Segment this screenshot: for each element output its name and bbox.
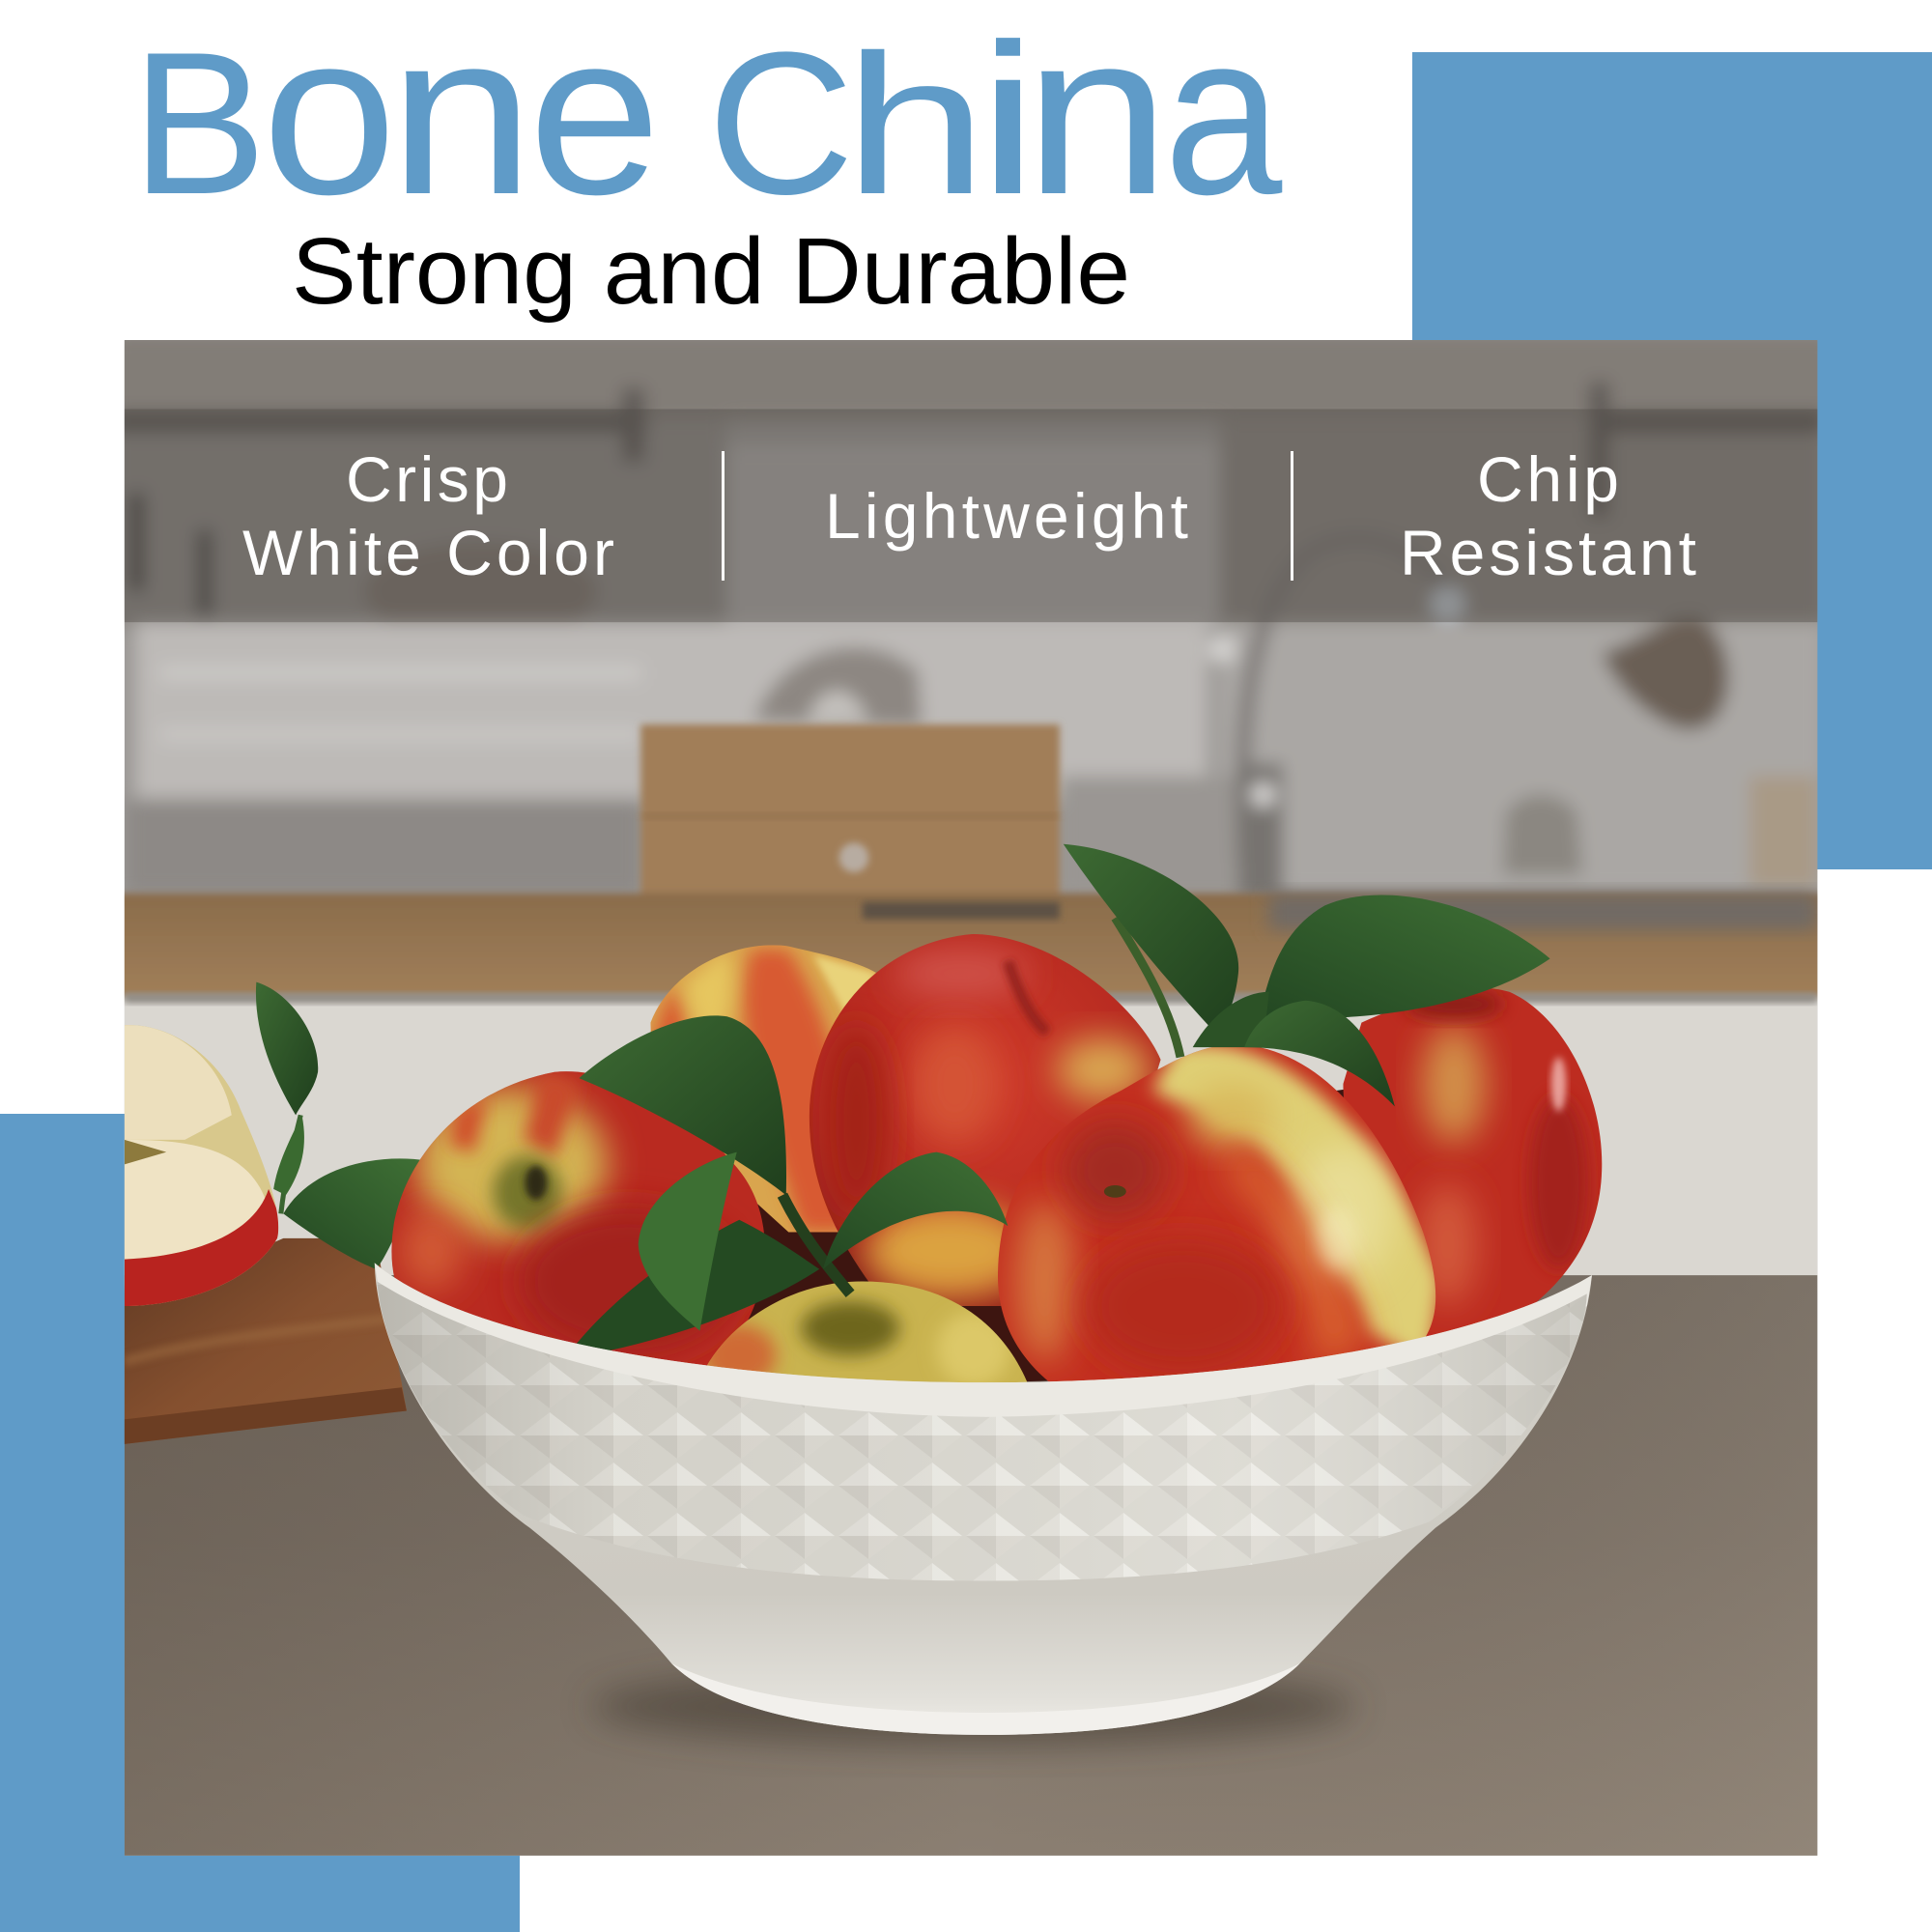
apples backing shadow (748, 1090, 1344, 1381)
label line: White Color: White Color (242, 517, 614, 588)
leaves: left sprig (256, 982, 428, 1269)
blue block: top right (1412, 52, 1932, 869)
bowl shadow (591, 1667, 1355, 1746)
cutting board (125, 1238, 407, 1444)
table top (125, 1275, 1817, 1856)
label line: Crisp: Crisp (346, 443, 508, 515)
leaves: top sprig (1064, 844, 1550, 1106)
blue block: bottom left (0, 1114, 520, 1932)
label line: Resistant: Resistant (1400, 517, 1696, 588)
divider left (722, 451, 724, 581)
label line: Chip: Chip (1477, 443, 1619, 515)
bowl (357, 1263, 1602, 1735)
grey overlay band (125, 409, 1817, 622)
feature: lightweight: Lightweight (825, 480, 1188, 552)
apple: front yellow (707, 1281, 1028, 1383)
subtitle: Strong and Durable (292, 218, 1130, 324)
title (131, 0, 1283, 242)
apple: far right (1343, 988, 1602, 1337)
divider right (1291, 451, 1293, 581)
feature: chip resistant (1400, 443, 1696, 588)
title: C (707, 10, 854, 237)
bowl foot highlight (671, 1663, 1300, 1735)
apple: back left (651, 945, 876, 1233)
bowl rim (375, 1263, 1592, 1419)
apple: big front (998, 1047, 1435, 1381)
apple: left (391, 1071, 764, 1366)
bowl body (375, 1263, 1592, 1735)
title: i (978, 0, 1038, 240)
background: blurred kitchen (111, 332, 1836, 1856)
title: B (131, 10, 267, 237)
bowl diamond band (357, 1269, 1602, 1589)
feature: crisp white color (242, 443, 614, 588)
apple: center (810, 934, 1161, 1306)
cut apple (125, 1025, 278, 1306)
panel: kitchen photo (111, 332, 1836, 1856)
title: h (843, 14, 987, 236)
leaves: center sprig (564, 1015, 1008, 1359)
